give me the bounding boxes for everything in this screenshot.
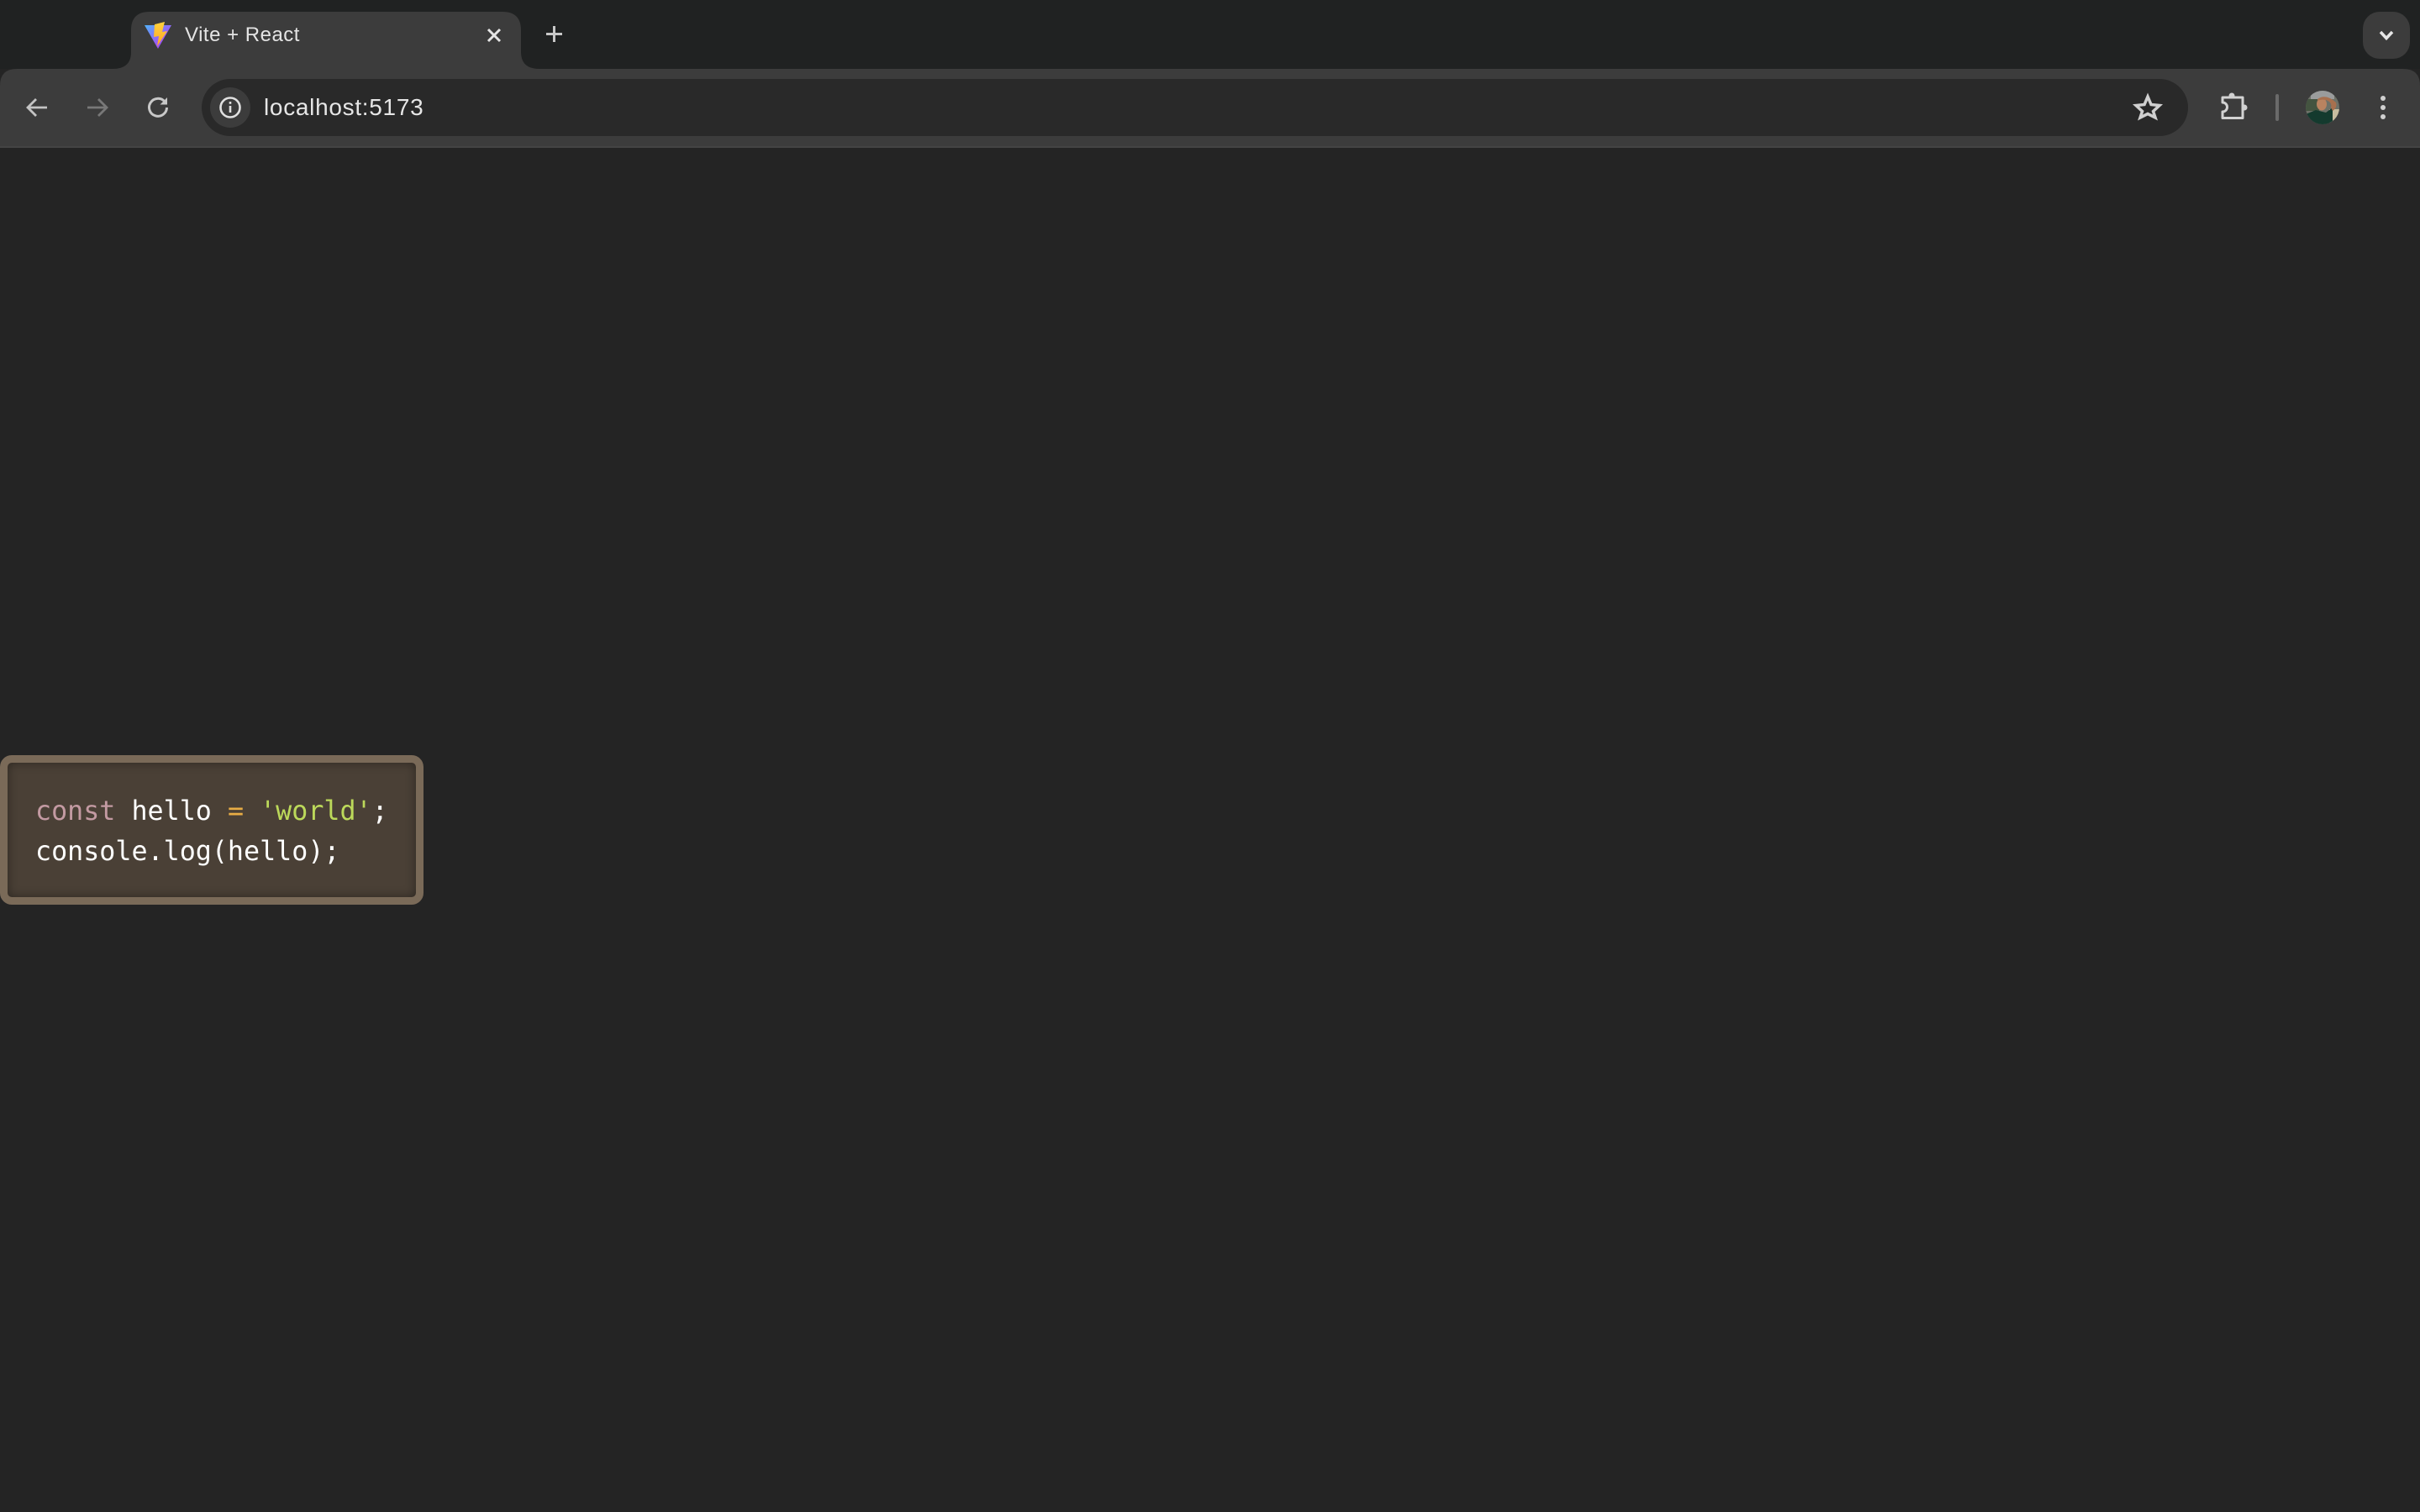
icon: reload [150,97,167,116]
icon: browser menu dots [2381,96,2386,119]
address bar url: localhost:5173 [264,94,424,120]
icon: bookmark star [2136,97,2160,118]
icon: Vite favicon [145,22,171,49]
icon: new tab plus [546,26,562,42]
address bar [202,79,2188,136]
tab title: Vite + React [185,24,300,46]
info chip [210,87,250,128]
icon: profile avatar [2306,91,2339,124]
browser chrome: tab strip and toolbar [0,12,2420,148]
toolbar separator [2275,94,2279,121]
icon: forward arrow [87,99,107,116]
icon: extensions puzzle [2223,92,2247,118]
toolbar bottom edge [0,146,2420,148]
code block: const hello = 'world'; console.log(hello); [35,796,388,867]
tab list button [2363,12,2410,59]
toolbar background [0,69,2420,148]
icon: back arrow [28,99,47,116]
code block [0,755,424,905]
icon: tab close [488,29,500,41]
active tab [113,12,539,69]
